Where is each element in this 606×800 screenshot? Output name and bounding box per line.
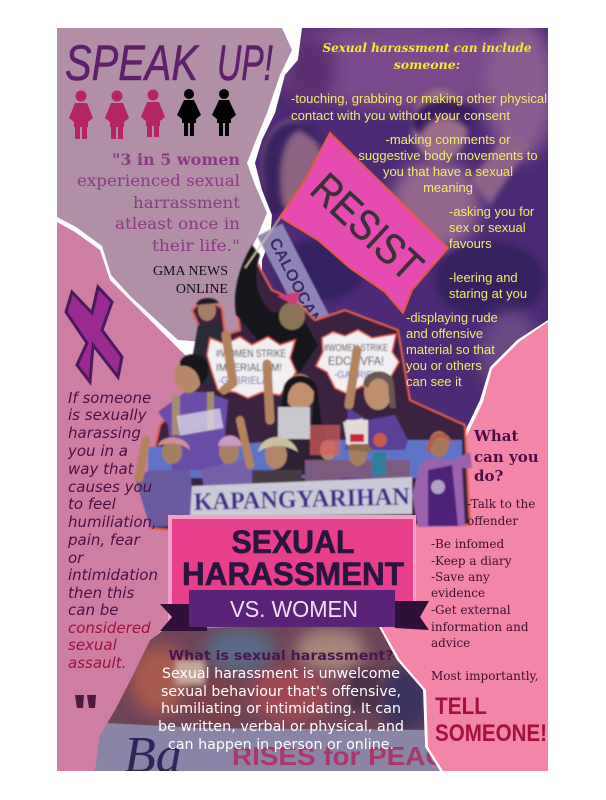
title: Speak Up!: SPEAK (65, 35, 200, 91)
source: GMA News Online (153, 264, 228, 297)
icon: quotation mark (75, 695, 96, 708)
action list: Most importantly, (431, 669, 539, 683)
person: woman at right (343, 350, 408, 450)
sash: Caloocan: CALOOCAN (265, 235, 324, 329)
text: if someone is harassing: can be (68, 601, 118, 619)
people at right of crowd (305, 420, 410, 488)
banner lettering (124, 738, 436, 771)
action list: -Get external (431, 603, 511, 617)
person: woman in centre (267, 364, 330, 475)
icon: woman 2 (105, 90, 129, 139)
text: if someone is harassing: humiliation, (68, 513, 157, 531)
text: if someone is harassing: sexual (68, 636, 118, 654)
source: GMA News Online: GMA NEWS (153, 264, 228, 279)
text: if someone is harassing: way that (68, 460, 135, 478)
banner: Kapangyarihan: KAPANGYARIHAN (193, 483, 410, 516)
list heading (322, 40, 532, 72)
protester crowd photo cut-out (135, 215, 472, 530)
person: woman with backpack (158, 335, 233, 470)
poster: sexual harassment: SEXUAL (232, 524, 354, 560)
panel: mauve statistic background (57, 28, 292, 345)
action list: offender (467, 514, 518, 528)
text: if someone is harassing: If someone (68, 389, 151, 407)
text: what is sexual harassment: What is sexual harassment? (168, 648, 394, 664)
ribbon (189, 590, 395, 627)
callout: tell someone: TELL (435, 693, 487, 720)
banner lettering: RISES for PEACE (232, 741, 464, 771)
poster: sexual harassment: VS. WOMEN (230, 596, 358, 622)
heading: What (473, 427, 518, 445)
statistic quote: "3 in 5 women (112, 150, 240, 169)
list item: displaying: material so that (406, 342, 495, 357)
list item: touching: contact with you without your consent (291, 108, 510, 123)
list item: displaying: can see it (406, 374, 462, 389)
list item: leering: staring at you (449, 286, 527, 301)
action list: information and (431, 620, 529, 634)
sign: women strike imperialism (207, 337, 296, 398)
list item: asking (449, 204, 535, 251)
list item: asking: -asking you for (449, 204, 535, 219)
list item: asking: sex or sexual (449, 220, 526, 235)
icon: woman 4 (177, 89, 201, 136)
action list: -Save any (431, 570, 490, 584)
action list: evidence (431, 586, 485, 600)
text: what is sexual harassment: sexual behaviour that's offensive, (161, 684, 401, 700)
sign: women strike EDCA VFA (316, 330, 399, 394)
ribbon tails (160, 601, 429, 631)
person: woman in pink cap (200, 420, 256, 490)
list item: touching (291, 91, 547, 123)
sign: women strike imperialism: #WOMEN STRIKE (216, 348, 286, 360)
sign: women strike EDCA VFA: EDCA VFA! (328, 354, 384, 368)
yellow list: forms of harassment (291, 40, 547, 389)
text: if someone is harassing: or (68, 549, 84, 567)
list item: comments (358, 132, 538, 195)
text: what is sexual harassment: Sexual harassment is unwelcome (162, 666, 400, 682)
list item: leering: -leering and (449, 270, 518, 285)
action list (431, 497, 539, 683)
text: if someone is harassing (67, 389, 158, 672)
text: if someone is harassing: intimidation (68, 566, 158, 584)
statistic quote (77, 150, 241, 255)
list item: displaying (406, 310, 498, 389)
lower banner (95, 723, 440, 771)
list item: displaying: and offensive (406, 326, 483, 341)
callout: tell someone: SOMEONE! (435, 720, 547, 747)
heading: do? (474, 467, 503, 485)
source: GMA News Online: ONLINE (176, 282, 228, 297)
list item: touching: -touching, grabbing or making other physical (291, 91, 547, 106)
callout: tell someone (435, 693, 547, 747)
list item: leering (449, 270, 527, 301)
text: if someone is harassing: to feel (68, 495, 117, 513)
heading: can you (474, 448, 539, 466)
poster: sexual harassment: HARASSMENT (182, 556, 404, 592)
statistic quote: atleast once in (115, 214, 240, 233)
list item: comments: meaning (423, 180, 473, 195)
flag pole (245, 215, 282, 268)
list item: displaying: -displaying rude (406, 310, 498, 325)
text: if someone is harassing: causes you (68, 478, 152, 496)
text: if someone is harassing: then this (68, 584, 134, 602)
sign: women strike EDCA VFA: -GABRIEL (334, 369, 378, 381)
flag: resist (280, 133, 448, 313)
action list: advice (431, 636, 470, 650)
action list: -Keep a diary (431, 554, 512, 568)
title: Speak Up!: UP! (217, 35, 273, 91)
person: black jacket holding flag (235, 245, 318, 372)
text: if someone is harassing: pain, fear (67, 531, 141, 549)
text: if someone is harassing: is sexually (68, 406, 148, 424)
list heading: Sexual harassment can include (322, 40, 532, 55)
list item: comments: -making comments or (386, 132, 511, 147)
text: what is sexual harassment: be written, verbal or physical, and (158, 719, 404, 735)
list item: comments: you that have a sexual (383, 164, 513, 179)
action list: -Talk to the (467, 497, 535, 511)
panel: right pink background (380, 322, 548, 771)
sign: women strike imperialism: -GABRIELA (218, 375, 269, 387)
list heading: someone: (394, 57, 460, 72)
text: what is sexual harassment: humiliating or intimidating. It can (161, 701, 401, 717)
icon: woman 1 (69, 90, 93, 139)
person: woman in pink hat (135, 437, 196, 527)
icon row: 3 of 5 women (69, 89, 236, 139)
text: if someone is harassing: harassing (68, 424, 141, 442)
icon: woman 3 (141, 90, 165, 137)
text: what is sexual harassment: can happen in person or online. (168, 737, 394, 753)
statistic quote: experienced sexual (77, 171, 240, 190)
sash: Caloocan (257, 223, 339, 347)
infographic canvas (57, 28, 548, 771)
crowd silhouette (148, 250, 470, 530)
person: woman in sun hat (252, 437, 302, 490)
text: if someone is harassing: considered (68, 619, 151, 637)
statistic quote: harrassment (133, 193, 241, 212)
text: if someone is harassing: assault. (68, 654, 126, 672)
blue banner behind crowd (148, 440, 462, 478)
text: what is sexual harassment (158, 648, 404, 753)
icon: purple X (66, 287, 122, 382)
text: what can you do (431, 427, 539, 683)
heading (473, 427, 539, 485)
panel: purple protest photo background (255, 28, 548, 430)
bottom photo panel (95, 627, 440, 771)
sign: women strike EDCA VFA: #WOMEN STRIKE (324, 342, 388, 354)
list item: comments: suggestive body movements to (358, 148, 538, 163)
text: if someone is harassing: you in a (67, 442, 128, 460)
panel: left pink background (57, 222, 230, 771)
sign: women strike imperialism: IMPERIALISM! (216, 362, 282, 374)
person: man in cap (192, 298, 225, 385)
flag: resist: RESIST (301, 164, 432, 291)
list item: displaying: you or others (406, 358, 482, 373)
list item: asking: favours (449, 236, 492, 251)
poster: sexual harassment (160, 515, 429, 631)
banner lettering: Ba (124, 727, 182, 784)
statistic quote: their life." (152, 236, 240, 255)
icon: woman 5 (212, 89, 236, 136)
person: woman in orange hood (412, 431, 472, 527)
action list: -Be infomed (431, 537, 505, 551)
